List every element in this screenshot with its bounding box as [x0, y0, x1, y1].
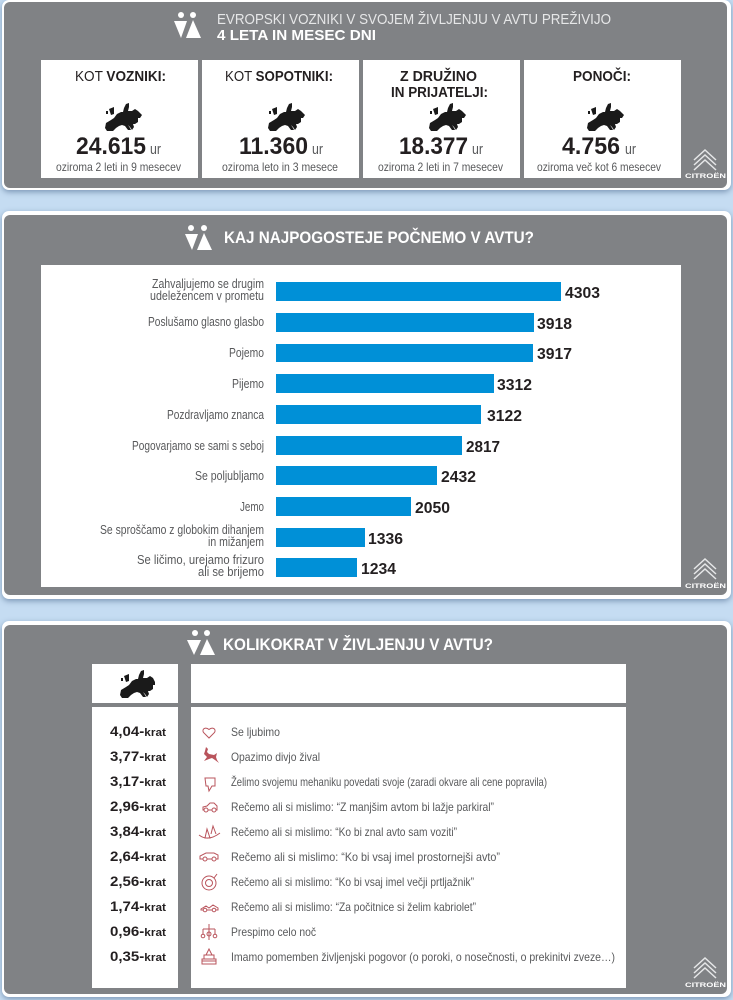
bar: singing: Pojemo: [229, 346, 264, 360]
heading: how many times: KOLIKOKRAT V ŽIVLJENJU V AVTU?: [223, 635, 493, 654]
card: as passenger: [202, 60, 359, 178]
card: with family and friends: [363, 60, 520, 178]
bar: kissing: Se poljubljamo: [195, 469, 264, 483]
bar: thanking other drivers: [150, 277, 600, 303]
bar: grooming: ali se brijemo: [198, 565, 264, 579]
logo: Citroen: [685, 559, 726, 590]
bar: grooming: 1234: [361, 561, 396, 578]
card: with family and friends: oziroma 2 leti in 7 mesecev: [378, 160, 503, 174]
bar: drinking: 3312: [497, 377, 532, 394]
heading: time in car: EVROPSKI VOZNIKI V SVOJEM ŽIVLJENJU V AVTU PREŽIVIJO: [217, 11, 611, 28]
card: with family and friends: Z DRUŽINO: [400, 67, 477, 85]
bar: kissing: [195, 466, 476, 486]
bar: drinking: [232, 374, 532, 394]
icon: couple: [185, 225, 212, 250]
bar: thanking other drivers: udeležencem v prometu: [150, 289, 264, 303]
text: smaller car: Rečemo ali si mislimo: “Z manjšim avtom bi lažje parkiral”: [231, 800, 494, 814]
bar: breathing and relaxing: 1336: [368, 531, 403, 548]
text: sleeping overnight: Prespimo celo noč: [231, 925, 316, 939]
text: wild animal: Opazimo divjo žival: [231, 750, 320, 764]
heading: time in car: [217, 11, 611, 44]
bar: grooming: Se ličimo, urejamo frizuro: [137, 553, 264, 567]
card: at night: oziroma več kot 6 mesecev: [537, 160, 661, 174]
bar: talking to ourselves: Pogovarjamo se sami s seboj: [132, 439, 264, 453]
bar: loud music: [148, 313, 572, 333]
bar: eating: 2050: [415, 500, 450, 517]
logo: Citroen: CITROËN: [685, 582, 726, 590]
column: counts: 3,84-krat: [110, 823, 166, 839]
card: at night: ur: [625, 141, 636, 158]
text: kissing: Se ljubimo: [231, 725, 280, 739]
header cell: Europe map: [92, 664, 178, 703]
icon: small car: [203, 803, 217, 812]
bar chart: [41, 265, 681, 587]
icon: couple: [187, 630, 215, 655]
column: counts: [92, 707, 178, 988]
column: counts: 1,74-krat: [110, 898, 166, 914]
bar: thanking other drivers: 4303: [565, 285, 600, 302]
icon: baby mobile: [201, 924, 217, 940]
card: as driver: oziroma 2 leti in 9 mesecev: [56, 160, 181, 174]
bar: thanking other drivers: Zahvaljujemo se drugim: [152, 277, 264, 291]
icon: deer: [204, 747, 219, 763]
column: activities: [191, 707, 626, 988]
text: roomier car: Rečemo ali si mislimo: “Ko bi vsaj imel prostornejši avto”: [231, 850, 500, 864]
card: as driver: [41, 60, 198, 178]
icon: wedding cake: [202, 949, 216, 964]
text: driving skill: Rečemo ali si mislimo: “Ko bi znal avto sam voziti”: [231, 825, 457, 839]
text: convertible: Rečemo ali si mislimo: “Za počitnice si želim kabriolet”: [231, 900, 476, 914]
panel: time spent in car: [2, 0, 731, 190]
bar: loud music: Poslušamo glasno glasbo: [148, 315, 264, 329]
card: at night: 4.756: [562, 133, 620, 160]
card: as driver: ur: [150, 141, 161, 158]
icon: couple: [174, 12, 201, 38]
bar: eating: [240, 497, 450, 517]
panel: what we most often do in the car: [2, 211, 731, 599]
card: with family and friends: ur: [472, 141, 483, 158]
bar: breathing and relaxing: in mižanjem: [208, 535, 264, 549]
card: as driver: 24.615: [76, 133, 146, 160]
icon: thumbs down: [205, 778, 215, 791]
header cell: empty: [191, 664, 626, 703]
card: at night: [524, 60, 681, 178]
bar: greeting an acquaintance: Pozdravljamo znanca: [167, 408, 264, 422]
text: life talk: Imamo pomemben življenjski pogovor (o poroki, o nosečnosti, o prekinitvi zveze…): [231, 950, 615, 964]
card: with family and friends: IN PRIJATELJI:: [391, 84, 488, 101]
logo: Citroen: [685, 150, 726, 180]
panel: how many times in a lifetime: [2, 621, 731, 997]
column: counts: 2,56-krat: [110, 873, 166, 889]
logo: Citroen: CITROËN: [685, 981, 726, 989]
column: counts: 0,35-krat: [110, 948, 166, 964]
card: as passenger: 11.360: [239, 133, 308, 160]
column: counts: 3,77-krat: [110, 748, 166, 764]
bar: greeting an acquaintance: 3122: [487, 408, 522, 425]
text: mechanic: Želimo svojemu mehaniku povedati svoje (zaradi okvare ali cene popravila): [231, 774, 547, 789]
logo: Citroen: [685, 958, 726, 989]
card: at night: PONOČI:: [573, 67, 631, 85]
text: bigger boot: Rečemo ali si mislimo: “Ko bi vsaj imel večji prtljažnik”: [231, 875, 474, 889]
bar: singing: 3917: [537, 346, 572, 363]
bar: loud music: 3918: [537, 316, 572, 333]
column: counts: 4,04-krat: [110, 723, 166, 739]
column: counts: 2,64-krat: [110, 848, 166, 864]
icon: heart: [203, 728, 215, 738]
bar: breathing and relaxing: Se sproščamo z globokim dihanjem: [100, 523, 264, 537]
bar: breathing and relaxing: [100, 523, 403, 549]
column: counts: 3,17-krat: [110, 773, 166, 789]
bar: grooming: [137, 553, 396, 579]
card: with family and friends: 18.377: [399, 133, 468, 160]
column: counts: 0,96-krat: [110, 923, 166, 939]
bar: singing: [229, 344, 572, 363]
bar: talking to ourselves: 2817: [466, 439, 500, 456]
heading: time in car: 4 LETA IN MESEC DNI: [217, 27, 376, 44]
bar: greeting an acquaintance: [167, 405, 522, 425]
icon: convertible: [201, 905, 218, 912]
heading: what we do: KAJ NAJPOGOSTEJE POČNEMO V AVTU?: [224, 228, 534, 247]
bar: eating: Jemo: [240, 500, 264, 514]
column: counts: 2,96-krat: [110, 798, 166, 814]
icon: traffic cones: [199, 826, 220, 838]
bar: drinking: Pijemo: [232, 377, 264, 391]
icon: spare wheel: [202, 874, 217, 890]
card: as passenger: ur: [312, 141, 323, 158]
logo: Citroen: CITROËN: [685, 172, 726, 180]
card: as driver: KOT VOZNIKI:: [75, 68, 166, 85]
card: as passenger: oziroma leto in 3 mesece: [222, 160, 338, 174]
card: as passenger: KOT SOPOTNIKI:: [225, 68, 333, 85]
bar: kissing: 2432: [441, 469, 476, 486]
bar: talking to ourselves: [132, 436, 500, 456]
icon: roomy car: [200, 853, 218, 861]
